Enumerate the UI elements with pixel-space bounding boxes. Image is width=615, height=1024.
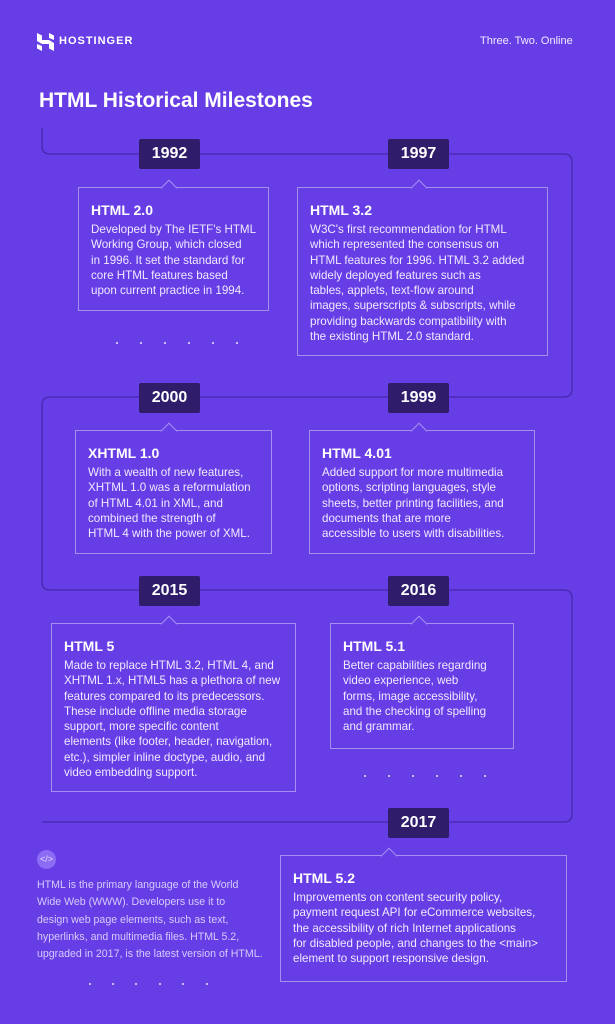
text block: about HTML: hyperlinks, and multimedia files. HTML 5.2, — [37, 931, 239, 943]
card: HTML 5.1: forms, image accessibility, — [343, 690, 477, 703]
logo: HOSTINGER — [59, 35, 133, 47]
year 1997: 1997 — [401, 145, 436, 162]
card: HTML 5.2: element to support responsive design. — [293, 952, 489, 965]
text block: about HTML — [37, 879, 263, 960]
card: HTML 5: Made to replace HTML 3.2, HTML 4, and — [64, 659, 274, 672]
card: HTML 5.1: HTML 5.1 — [343, 638, 405, 654]
tagline: Three. Two. Online — [480, 35, 573, 47]
year 2015 — [139, 576, 200, 606]
year 2016 — [388, 576, 449, 606]
card: HTML 3.2: HTML 3.2 — [310, 202, 372, 218]
card: HTML 3.2: HTML features for 1996. HTML 3.2 added — [310, 254, 524, 267]
card: HTML 2.0: Working Group, which closed — [91, 238, 242, 251]
card: XHTML 1.0: combined the strength of — [88, 512, 216, 525]
text block: about HTML: Wide Web (WWW). Developers use it to — [37, 896, 225, 908]
year 2017 — [388, 808, 449, 838]
card: HTML 5: XHTML 1.x, HTML5 has a plethora of new — [64, 674, 280, 687]
card: HTML 3.2: which represented the consensus on — [310, 238, 499, 251]
year 2017: 2017 — [401, 814, 436, 831]
card: HTML 5: HTML 5 — [64, 638, 114, 654]
card: XHTML 1.0: HTML 4 with the power of XML. — [88, 527, 250, 540]
card: HTML 3.2 — [297, 187, 548, 356]
card: XHTML 1.0: With a wealth of new features, — [88, 466, 243, 479]
icon: code: </> — [40, 854, 53, 864]
card: HTML 5: These include offline media storage — [64, 705, 247, 718]
card: HTML 3.2: tables, applets, text-flow around — [310, 284, 474, 297]
year 2015: 2015 — [152, 582, 187, 599]
card: HTML 5: etc.), simpler inline doctype, audio, and — [64, 751, 265, 764]
card: HTML 5.2: payment request API for eCommerce websites, — [293, 906, 535, 919]
icon: code — [37, 850, 56, 869]
year 1999: 1999 — [401, 389, 436, 406]
dots — [89, 983, 208, 985]
text block: about HTML: design web page elements, such as text, — [37, 914, 228, 926]
card: HTML 3.2: providing backwards compatibility with — [310, 315, 507, 328]
card: HTML 3.2: W3C's first recommendation for HTML — [310, 223, 507, 236]
card: XHTML 1.0 — [75, 430, 272, 554]
card: HTML 2.0: upon current practice in 1994. — [91, 284, 244, 297]
year 2016: 2016 — [401, 582, 436, 599]
card: HTML 5.1: and the checking of spelling — [343, 705, 486, 718]
card: XHTML 1.0: XHTML 1.0 — [88, 445, 159, 461]
card: HTML 5.2: for disabled people, and changes to the <main> — [293, 937, 538, 950]
card: XHTML 1.0: of HTML 4.01 in XML, and — [88, 497, 223, 510]
card: HTML 4.01: Added support for more multimedia — [322, 466, 503, 479]
card: HTML 4.01: accessible to users with disabilities. — [322, 527, 504, 540]
year 2000 — [139, 383, 200, 413]
card: HTML 4.01 — [309, 430, 535, 554]
card: HTML 3.2: the existing HTML 2.0 standard. — [310, 330, 474, 343]
card: HTML 5.2: HTML 5.2 — [293, 870, 355, 886]
card: HTML 5.2 — [280, 855, 567, 982]
card: HTML 5.1 — [330, 623, 514, 749]
year 2000: 2000 — [152, 389, 187, 406]
dots — [116, 342, 238, 344]
card: HTML 5.2: Improvements on content security policy, — [293, 891, 502, 904]
year 1997 — [388, 139, 449, 169]
logo — [37, 33, 133, 51]
card: HTML 2.0 — [78, 187, 269, 311]
card: HTML 5.1: video experience, web — [343, 674, 458, 687]
card: HTML 4.01: documents that are more — [322, 512, 451, 525]
dots — [364, 775, 486, 777]
card: HTML 4.01: sheets, better printing facilities, and — [322, 497, 504, 510]
card: HTML 5: features compared to its predecessors. — [64, 690, 264, 703]
card: HTML 3.2: widely deployed features such as — [310, 269, 481, 282]
card: HTML 4.01: HTML 4.01 — [322, 445, 392, 461]
card: HTML 3.2: images, superscripts & subscripts, while — [310, 299, 516, 312]
card: HTML 2.0: core HTML features based — [91, 269, 228, 282]
text block: about HTML: upgraded in 2017, is the latest version of HTML. — [37, 948, 263, 960]
card: XHTML 1.0: XHTML 1.0 was a reformulation — [88, 481, 251, 494]
year 1999 — [388, 383, 449, 413]
card: HTML 5.1: Better capabilities regarding — [343, 659, 487, 672]
card: HTML 5: elements (like footer, header, navigation, — [64, 735, 272, 748]
card: HTML 2.0: Developed by The IETF's HTML — [91, 223, 256, 236]
card: HTML 5.1: and grammar. — [343, 720, 415, 733]
card: HTML 5 — [51, 623, 296, 792]
card: HTML 5: video embedding support. — [64, 766, 197, 779]
text block: about HTML: HTML is the primary language of the World — [37, 879, 238, 891]
card: HTML 5.2: the accessibility of rich Internet applications — [293, 922, 516, 935]
card: HTML 4.01: options, scripting languages, style — [322, 481, 496, 494]
title: HTML Historical Milestones — [39, 89, 313, 112]
year 1992 — [139, 139, 200, 169]
card: HTML 2.0: HTML 2.0 — [91, 202, 153, 218]
year 1992: 1992 — [152, 145, 187, 162]
card: HTML 2.0: in 1996. It set the standard for — [91, 254, 245, 267]
card: HTML 5: support, more specific content — [64, 720, 219, 733]
